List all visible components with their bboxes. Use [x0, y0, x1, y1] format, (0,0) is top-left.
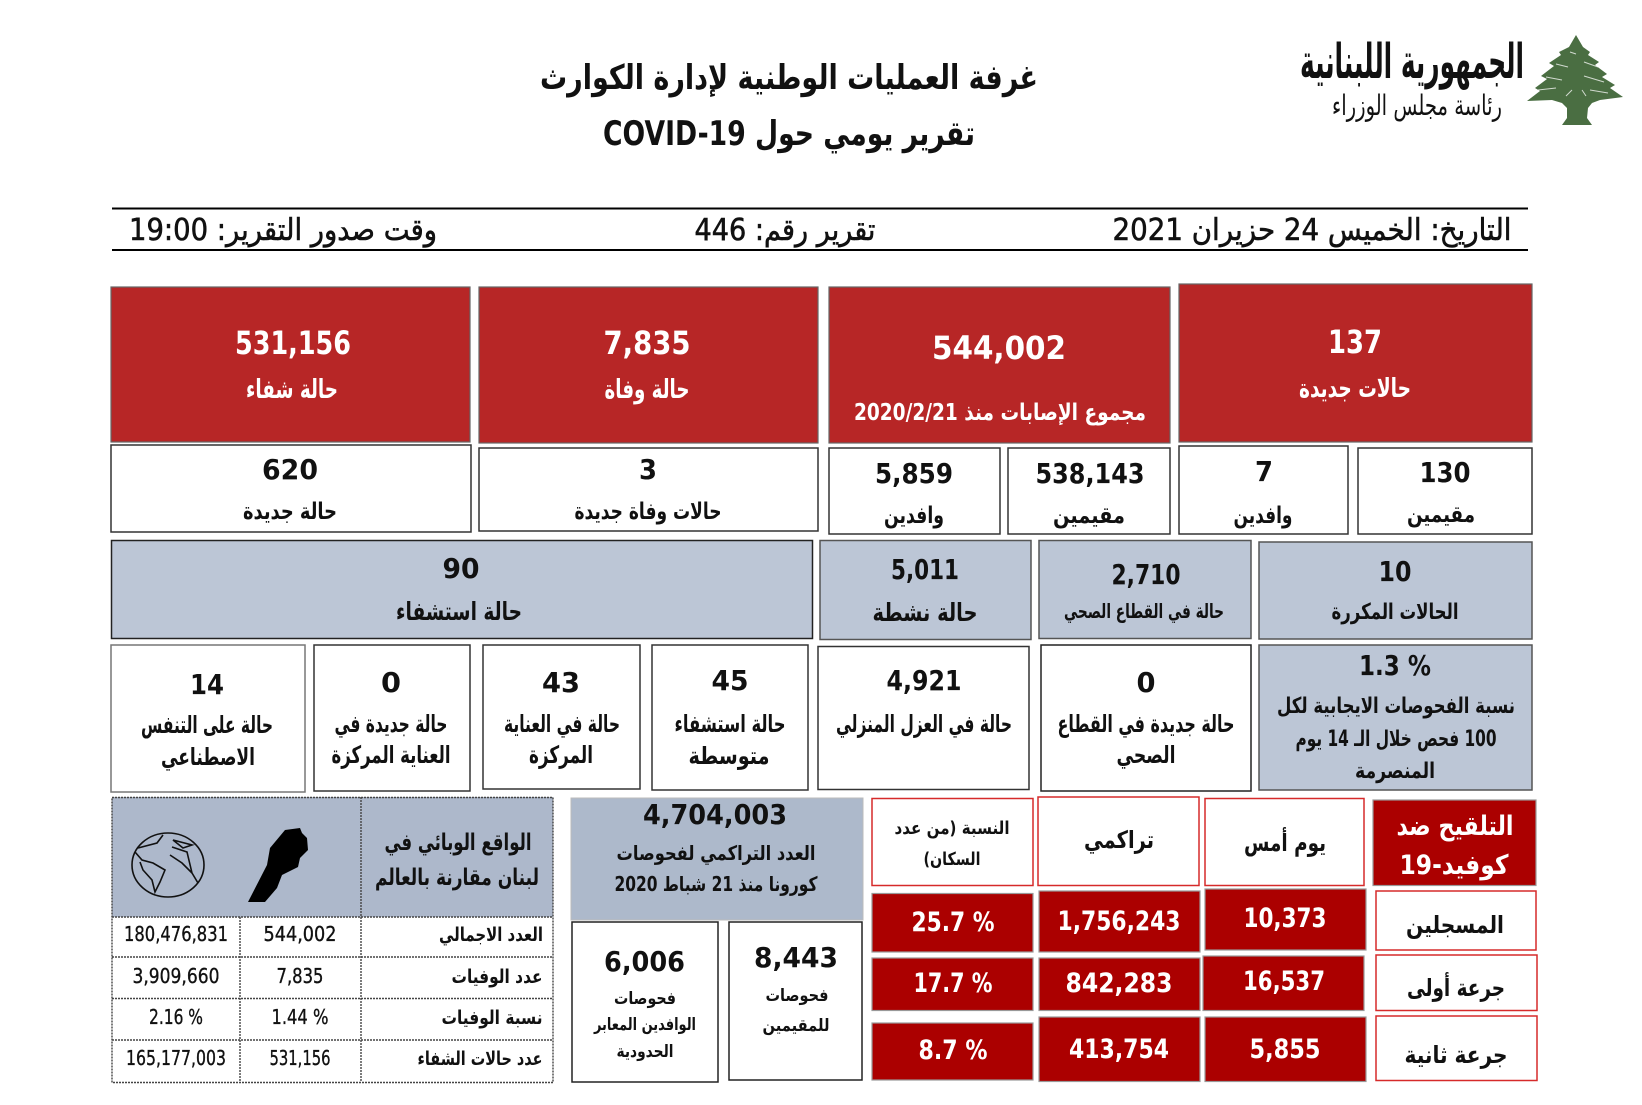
panel: repeated cases: 10	[1378, 555, 1412, 588]
panel: total infections: 544,002	[932, 329, 1066, 367]
row: total	[124, 922, 543, 946]
row: recoveries: 531,156	[270, 1046, 330, 1070]
panel: new cases	[1179, 284, 1532, 442]
row: deaths	[132, 964, 542, 988]
row: registered	[872, 889, 1536, 952]
row: first dose: 842,283	[1066, 968, 1172, 999]
panel: active cases: حالة نشطة	[872, 598, 978, 627]
panel: new travellers: 7	[1255, 455, 1273, 488]
panel: total infections	[829, 287, 1170, 443]
panel: positivity: نسبة الفحوصات الايجابية لكل	[1277, 694, 1515, 719]
column: yesterday	[1205, 798, 1364, 886]
panel: recoveries: حالة شفاء	[246, 375, 338, 405]
row: deaths: 7,835	[276, 964, 324, 988]
panel: resident tests: 8,443	[754, 941, 838, 974]
panel: cumulative tests: 4,704,003	[643, 798, 787, 831]
row: total: العدد الاجمالي	[439, 924, 543, 946]
panel: moderate hospitalization: متوسطة	[688, 742, 770, 770]
panel: new health sector: 0	[1136, 666, 1156, 699]
panel: cumulative tests: كورونا منذ 21 شباط 2020	[614, 872, 818, 896]
panel: ICU: 43	[542, 666, 580, 699]
report time: وقت صدور التقرير: 19:00	[129, 213, 437, 248]
panel: moderate hospitalization: 45	[712, 664, 748, 697]
panel: deaths: 7,835	[604, 324, 690, 362]
icon: cedar tree	[1527, 35, 1623, 125]
panel: recoveries	[111, 287, 470, 442]
panel: positivity: المنصرمة	[1355, 759, 1435, 784]
panel: active cases	[820, 540, 1031, 640]
row: deaths: عدد الوفيات	[452, 966, 542, 988]
panel: ventilator: 14	[190, 668, 224, 701]
panel: new deaths	[479, 448, 818, 531]
panel: total travellers: 5,859	[875, 457, 953, 490]
row: second dose: 5,855	[1250, 1034, 1320, 1065]
panel: traveller tests	[572, 922, 718, 1082]
row: fatality rate	[149, 1005, 542, 1029]
panel: ICU	[483, 645, 640, 789]
panel: new recoveries	[111, 445, 471, 532]
panel: ICU: المركزة	[529, 741, 593, 769]
row: second dose: 8.7 %	[918, 1035, 988, 1066]
icon: globe	[132, 833, 204, 897]
row: deaths: 3,909,660	[132, 964, 220, 988]
panel: traveller tests: 6,006	[604, 945, 685, 978]
panel: active cases: 5,011	[891, 553, 959, 586]
row: fatality rate: نسبة الوفيات	[442, 1007, 542, 1029]
column: cumulative	[1038, 797, 1199, 886]
row: recoveries: عدد حالات الشفاء	[418, 1048, 542, 1070]
panel: resident tests: فحوصات	[766, 986, 828, 1006]
row: registered: 10,373	[1244, 903, 1326, 934]
row: total: 180,476,831	[124, 922, 228, 946]
panel: new health sector	[1041, 645, 1251, 791]
row: fatality rate: 1.44 %	[272, 1005, 328, 1029]
row: recoveries: 165,177,003	[126, 1046, 226, 1070]
panel: deaths	[479, 287, 818, 443]
panel: new travellers	[1179, 446, 1348, 534]
panel: new ICU: حالة جديدة في	[334, 710, 448, 738]
panel: repeated cases	[1259, 542, 1532, 639]
panel: total residents	[1008, 448, 1170, 534]
title	[540, 58, 1038, 154]
panel: new recoveries: حالة جديدة	[243, 499, 337, 525]
row: second dose: 413,754	[1069, 1034, 1169, 1065]
panel: new residents: 130	[1420, 456, 1470, 489]
report number: تقرير رقم: 446	[694, 213, 876, 248]
panel: Lebanon vs world table: لبنان مقارنة بالعالم	[375, 865, 539, 891]
row: registered: 1,756,243	[1058, 906, 1180, 937]
panel: new ICU: العناية المركزة	[332, 741, 450, 769]
panel: total residents: مقيمين	[1053, 503, 1125, 529]
vaccination title: كوفيد-19	[1400, 850, 1509, 881]
title line 2: تقرير يومي حول COVID-19	[603, 114, 975, 154]
row: first dose: 16,537	[1243, 966, 1325, 997]
column: yesterday: يوم أمس	[1244, 827, 1326, 857]
panel: vaccination table	[872, 797, 1537, 1082]
panel: traveller tests: الوافدين المعابر	[593, 1015, 696, 1035]
panel: ventilator: حالة على التنفس	[141, 711, 273, 739]
report meta strip	[112, 208, 1528, 251]
panel: recoveries: 531,156	[235, 324, 351, 362]
panel: ventilator: الاصطناعي	[161, 743, 255, 771]
panel: repeated cases: الحالات المكررة	[1332, 600, 1458, 625]
panel: new recoveries: 620	[262, 453, 318, 486]
panel: Lebanon vs world table	[112, 797, 553, 1082]
logo: Lebanese Republic presidency of the council of ministers	[1300, 34, 1623, 125]
icon: Lebanon map	[248, 828, 308, 902]
panel: positivity: 100 فحص خلال الـ 14 يوم	[1296, 727, 1496, 752]
panel: new residents: مقيمين	[1407, 502, 1475, 528]
vaccination title	[1373, 800, 1536, 886]
row: first dose: 17.7 %	[914, 968, 992, 999]
panel: positivity: 1.3 %	[1359, 649, 1431, 682]
column: share of population	[872, 798, 1033, 886]
panel: moderate hospitalization: حالة استشفاء	[674, 710, 786, 738]
panel: health sector cases	[1039, 540, 1251, 638]
panel: ventilator	[111, 645, 305, 792]
vaccination title: التلقيح ضد	[1396, 811, 1514, 842]
panel: new deaths: 3	[639, 453, 657, 486]
panel: hospitalized: 90	[442, 552, 480, 585]
panel: home isolation: حالة في العزل المنزلي	[836, 710, 1012, 738]
column: share of population: النسبة (من عدد	[894, 818, 1010, 839]
panel: moderate hospitalization	[652, 645, 808, 790]
row: first dose: جرعة أولى	[1407, 972, 1505, 1002]
row: total: 544,002	[264, 922, 336, 946]
panel: health sector cases: حالة في القطاع الصحي	[1064, 599, 1224, 624]
panel: positivity	[1259, 645, 1532, 790]
row: registered: المسجلين	[1406, 911, 1504, 939]
panel: new travellers: وافدين	[1234, 503, 1292, 529]
row: second dose: جرعة ثانية	[1404, 1041, 1508, 1069]
panel: hospitalized: حالة استشفاء	[396, 597, 522, 626]
panel: new cases: 137	[1328, 323, 1382, 361]
panel: health sector cases: 2,710	[1112, 558, 1180, 591]
panel: home isolation	[818, 646, 1029, 790]
panel: resident tests	[729, 922, 862, 1080]
title line 1: غرفة العمليات الوطنية لإدارة الكوارث	[540, 58, 1038, 98]
calligraphy: presidency: رئاسة مجلس الوزراء	[1332, 89, 1502, 122]
row: first dose	[872, 955, 1537, 1010]
panel: ICU: حالة في العناية	[504, 710, 620, 738]
panel: new ICU: 0	[381, 666, 401, 699]
panel: total travellers: وافدين	[884, 503, 944, 529]
panel: total residents: 538,143	[1036, 457, 1144, 490]
panel: new health sector: الصحي	[1116, 741, 1176, 769]
panel: new deaths: حالات وفاة جديدة	[574, 499, 722, 525]
column: cumulative: تراكمي	[1084, 826, 1154, 854]
panel: home isolation: 4,921	[886, 664, 962, 697]
panel: traveller tests: فحوصات	[614, 989, 676, 1009]
panel: new health sector: حالة جديدة في القطاع	[1058, 710, 1234, 738]
panel: total travellers	[829, 448, 1000, 534]
row: registered: 25.7 %	[912, 907, 994, 938]
panel: hospitalized	[112, 540, 812, 638]
panel: new ICU	[314, 645, 470, 791]
panel: total infections: مجموع الإصابات منذ 2020/2/21	[854, 400, 1146, 426]
row: recoveries	[126, 1046, 542, 1070]
row: fatality rate: 2.16 %	[149, 1005, 203, 1029]
row: second dose	[872, 1016, 1537, 1082]
panel: new residents	[1358, 448, 1532, 534]
panel: traveller tests: الحدودية	[616, 1042, 674, 1062]
column: share of population: السكان)	[924, 849, 980, 870]
panel: cumulative tests: العدد التراكمي لفحوصات	[616, 841, 816, 866]
panel: cumulative tests	[571, 798, 863, 920]
report date: التاريخ: الخميس 24 حزيران 2021	[1112, 213, 1512, 248]
panel: new cases: حالات جديدة	[1299, 374, 1411, 404]
heading: الواقع الوبائي في	[384, 830, 532, 856]
panel: resident tests: للمقيمين	[762, 1016, 830, 1036]
panel: deaths: حالة وفاة	[604, 375, 690, 405]
